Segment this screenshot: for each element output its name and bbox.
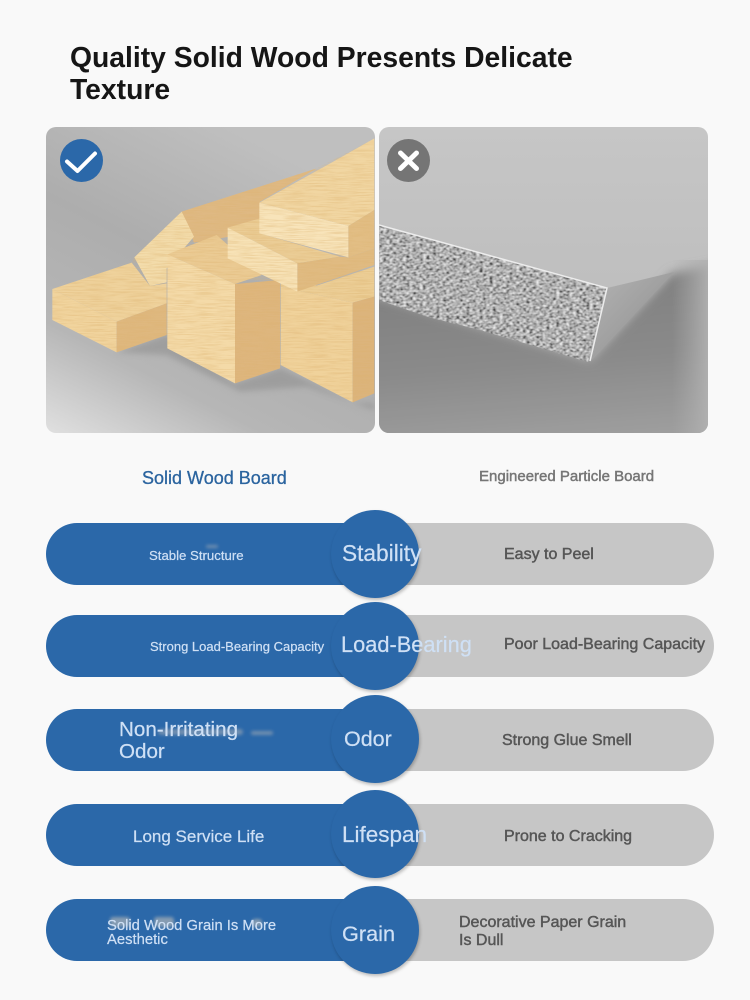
row: odor <box>46 695 714 786</box>
row: stability: Easy to Peel <box>504 546 594 563</box>
row: grain: Grain <box>342 921 395 946</box>
title <box>70 41 573 105</box>
row: odor: Non-Irritating <box>119 718 238 741</box>
wood stack <box>52 138 374 408</box>
row: odor: Odor <box>344 727 392 751</box>
row: lifespan: Long Service Life <box>133 827 264 846</box>
row: grain: Decorative Paper Grain <box>459 914 626 931</box>
panel: particle board photo <box>379 127 708 433</box>
row: load-bearing: Load-Bearing <box>341 632 472 657</box>
row: load-bearing: Poor Load-Bearing Capacity <box>504 636 705 653</box>
row: grain: Aesthetic <box>107 932 168 948</box>
panel: solid wood photo <box>46 127 375 433</box>
title: Quality Solid Wood Presents Delicate <box>70 41 573 73</box>
lower shadow area <box>379 260 708 433</box>
row: odor: Strong Glue Smell <box>502 732 632 749</box>
icon: check badge <box>60 139 103 182</box>
row: stability: Stable Structure <box>149 548 244 563</box>
row: stability: Stability <box>342 540 421 566</box>
row: load-bearing: Strong Load-Bearing Capacity <box>150 639 324 654</box>
row: lifespan: Prone to Cracking <box>504 828 632 845</box>
row: grain: Is Dull <box>459 932 503 949</box>
row: stability <box>46 510 714 602</box>
row: grain <box>46 886 714 978</box>
heading: engineered particle board: Engineered Particle Board <box>479 468 654 485</box>
board cut face with chip texture <box>379 220 611 365</box>
heading: solid wood board: Solid Wood Board <box>142 468 287 488</box>
row: odor: Odor <box>119 740 165 763</box>
board side face <box>592 273 671 354</box>
row: load-bearing <box>46 602 714 694</box>
row: grain: Solid Wood Grain Is More <box>107 918 276 934</box>
row: lifespan: Lifespan <box>342 822 427 847</box>
title: Texture <box>70 73 170 105</box>
row: lifespan <box>46 790 714 882</box>
icon: cross badge <box>387 139 430 182</box>
